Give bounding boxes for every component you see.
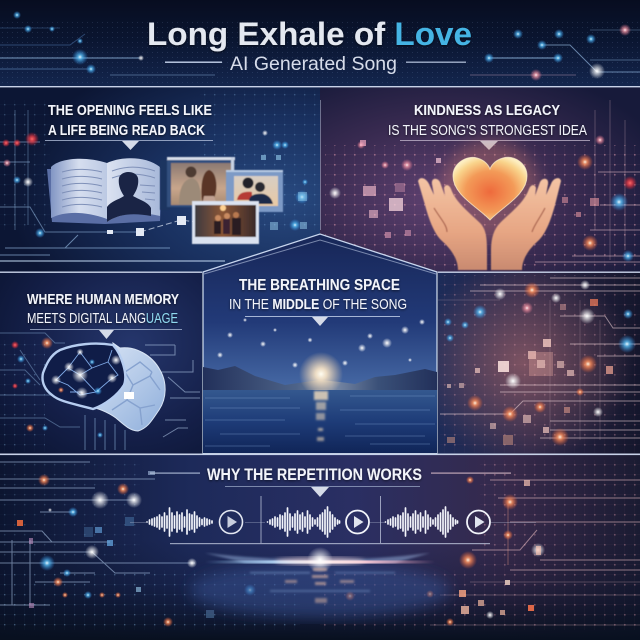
waveform 1 with play button: [147, 508, 242, 536]
icon: open book with silhouette: [47, 158, 163, 224]
callout pointer: memory: [30, 329, 182, 339]
icon: cupped hands: [418, 178, 561, 270]
heading: opening: [48, 103, 212, 139]
callout pointer: repetition: [225, 486, 420, 497]
photo: couple: [160, 157, 235, 210]
heading: kindness: [388, 103, 587, 139]
heading: opening: A LIFE BEING READ BACK: [48, 123, 205, 139]
heading: breathing space: [229, 277, 407, 313]
heading: kindness: IS THE SONG'S STRONGEST IDEA: [388, 123, 587, 139]
waves: [205, 396, 435, 446]
heading: memory: MEETS DIGITAL LANGUAGE: [27, 311, 178, 327]
heading: memory: [27, 292, 179, 327]
panel: right middle background: [438, 272, 640, 454]
heading: memory: WHERE HUMAN MEMORY: [27, 292, 179, 308]
subtitle: AI Generated Song: [230, 54, 397, 75]
heading: repetition: WHY THE REPETITION WORKS: [207, 466, 422, 484]
sea: [203, 390, 437, 453]
panel: opening background: [0, 87, 320, 273]
icon: glowing heart: [453, 157, 527, 220]
photo: family gathering: [192, 201, 259, 244]
sun: [299, 352, 343, 396]
memory path nodes: [107, 216, 186, 236]
heading: breathing space: IN THE MIDDLE OF THE SONG: [229, 297, 407, 313]
header background: [0, 0, 640, 87]
panel: kindness background: [320, 87, 640, 273]
callout pointer: breathing space: [245, 316, 400, 326]
horizontal divider lines: [0, 86, 640, 455]
panel: repetition background: [0, 454, 640, 640]
photo: children: [226, 170, 283, 212]
callout pointer: opening: [45, 140, 213, 150]
waveform 3 with play button: [386, 507, 490, 537]
panel: memory background: [0, 272, 202, 454]
mountains: [203, 366, 437, 390]
heading: breathing space: THE BREATHING SPACE: [239, 277, 400, 294]
audio panel frame: [130, 496, 536, 544]
heading: kindness: KINDNESS AS LEGACY: [414, 103, 560, 119]
callout pointer: kindness: [400, 140, 590, 150]
silhouette: [107, 172, 151, 222]
heading: opening: THE OPENING FEELS LIKE: [48, 103, 212, 119]
horizon glow and reflection: [190, 547, 450, 618]
sky stars: [217, 318, 425, 368]
waveform 2 with play button: [268, 507, 369, 537]
panel: breathing space sea scene: [203, 234, 437, 454]
title: Long Exhale of Love: [147, 16, 472, 52]
sun reflection: [314, 391, 328, 441]
heart glow: [440, 140, 540, 240]
icon: half digital brain: [42, 343, 165, 431]
